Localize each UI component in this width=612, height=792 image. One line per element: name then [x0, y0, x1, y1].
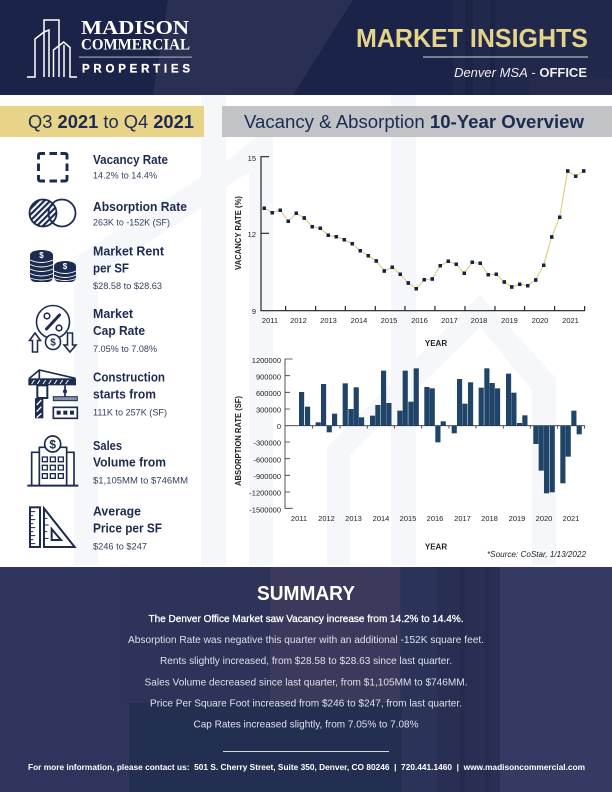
- absorption year labels: 2021: [563, 514, 579, 523]
- summary text: Absorption Rate was negative this quarter with an additional -152K square feet.: [128, 634, 484, 646]
- vacancy x-axis title: YEAR: [425, 339, 447, 348]
- vacancy year labels: 2019: [501, 316, 518, 325]
- absorption y labels: 600000: [256, 389, 281, 398]
- summary text: Rents slightly increased, from $28.58 to $28.63 since last quarter.: [160, 655, 452, 667]
- icon: cap rate: $: [50, 338, 56, 348]
- summary text: Cap Rates increased slightly, from 7.05% to 7.08%: [194, 718, 418, 730]
- metric: cap rate: Cap Rate: [93, 323, 145, 338]
- metric: market rent: [93, 244, 165, 292]
- summary text: [128, 613, 484, 730]
- absorption axes: [285, 359, 585, 508]
- absorption y labels: 0: [277, 422, 281, 431]
- icon: cap rate: [30, 306, 76, 352]
- metric: vacancy rate: [93, 152, 168, 182]
- metric: cap rate: Market: [93, 306, 134, 321]
- absorption x-axis title: YEAR: [425, 542, 447, 552]
- metric: market rent: per SF: [93, 260, 129, 276]
- logo wordmark: [79, 17, 192, 76]
- metric: absorption rate: [93, 199, 187, 228]
- summary panel: [0, 567, 612, 792]
- vacancy year labels: 2013: [320, 316, 337, 325]
- absorption year labels: 2017: [454, 514, 471, 523]
- source note: *Source: CoStar, 1/13/2022: [487, 550, 587, 559]
- icon: coin stacks: [30, 250, 76, 282]
- absorption year labels: 2015: [400, 514, 416, 523]
- metric: cap rate: [93, 306, 158, 355]
- summary text: Price Per Square Foot increased from $246 to $247, from last quarter.: [150, 698, 462, 710]
- metric: vacancy rate: Vacancy Rate: [93, 152, 168, 167]
- summary background: [0, 567, 612, 792]
- chart banner: Vacancy & Absorption 10-Year Overview: [244, 111, 585, 132]
- vacancy axes: [261, 157, 585, 311]
- vacancy y labels: 12: [248, 230, 256, 239]
- absorption y labels: -1200000: [249, 488, 281, 498]
- summary text: Sales Volume decreased since last quarter, from $1,105MM to $746MM.: [144, 676, 468, 688]
- icon: ruler and set square: [30, 507, 75, 547]
- metric: sales volume: $1,105MM to $746MM: [93, 476, 188, 486]
- logo wordmark: PROPERTIES: [82, 64, 190, 76]
- absorption year labels: 2011: [291, 514, 307, 523]
- metric: market rent: $28.58 to $28.63: [93, 281, 162, 292]
- vacancy year labels: 2011: [262, 316, 278, 325]
- icon: vacancy rate: [38, 154, 67, 181]
- absorption y labels: 300000: [256, 406, 281, 414]
- absorption year labels: 2012: [318, 514, 335, 523]
- vacancy y labels: 15: [248, 154, 256, 163]
- absorption y labels: [249, 356, 281, 514]
- metric: absorption rate: Absorption Rate: [93, 199, 187, 214]
- icon: office building with dollar: $: [49, 437, 56, 451]
- absorption year labels: 2018: [481, 514, 498, 523]
- summary heading: SUMMARY: [257, 583, 356, 605]
- vacancy year labels: 2021: [562, 316, 579, 325]
- absorption year labels: 2014: [373, 514, 389, 523]
- metric: sales volume: Sales: [93, 438, 122, 453]
- metric: construction starts: 111K to 257K (SF): [93, 408, 167, 418]
- logo wordmark: COMMERCIAL: [81, 36, 190, 54]
- vacancy year labels: 2015: [381, 316, 397, 325]
- title: Market Insights: MARKET INSIGHTS: [356, 23, 588, 53]
- metric: construction starts: starts from: [93, 386, 156, 402]
- logo: Madison Commercial Properties: [27, 17, 192, 77]
- vacancy data line: [264, 171, 584, 289]
- subtitle: Denver MSA - Office: Denver MSA - OFFICE: [454, 65, 587, 80]
- metric: average price: Price per SF: [93, 520, 162, 536]
- vacancy year labels: [262, 316, 579, 325]
- vacancy year labels: 2014: [351, 316, 367, 325]
- icon: absorption rate: [30, 200, 76, 226]
- metric: sales volume: [93, 438, 188, 486]
- period banner: [0, 106, 204, 137]
- header band: [0, 0, 612, 95]
- metric: construction starts: [93, 370, 167, 418]
- metric: average price: Average: [93, 504, 141, 518]
- line chart: vacancy rate: [234, 154, 585, 348]
- logo wordmark: MADISON: [81, 17, 190, 39]
- metric: vacancy rate: 14.2% to 14.4%: [93, 170, 158, 182]
- absorption year labels: 2020: [536, 514, 552, 523]
- metric: cap rate: 7.05% to 7.08%: [93, 344, 158, 355]
- absorption y labels: -900000: [253, 472, 281, 481]
- absorption year labels: [291, 514, 579, 523]
- vacancy year labels: 2012: [290, 316, 307, 325]
- vacancy year labels: 2020: [532, 316, 548, 325]
- absorption y labels: -1500000: [249, 506, 281, 514]
- header rule: [423, 56, 588, 58]
- icon: construction crane: [28, 370, 77, 418]
- vacancy year labels: 2017: [441, 316, 458, 325]
- metric: market rent: Market Rent: [93, 244, 165, 258]
- metric: construction starts: Construction: [93, 370, 165, 384]
- vacancy y labels: [248, 154, 256, 316]
- icon: coin stacks: $: [63, 262, 68, 271]
- metric: sales volume: Volume from: [93, 454, 166, 470]
- vacancy y labels: 9: [252, 307, 256, 316]
- vacancy y-axis title: VACANCY RATE (%): [234, 196, 243, 270]
- background watermark: building outlines: [74, 95, 556, 565]
- absorption y-axis title: ABSORPTION RATE (SF): [234, 396, 243, 486]
- vacancy year labels: 2016: [411, 316, 428, 325]
- period banner: Q3 2021 to Q4 2021: [28, 111, 194, 132]
- bar chart: absorption rate: [234, 356, 585, 552]
- logo icon: skyline: [27, 20, 77, 77]
- icon: office building with dollar: [27, 436, 78, 486]
- absorption y labels: 900000: [256, 372, 281, 382]
- summary text: The Denver Office Market saw Vacancy increase from 14.2% to 14.4%.: [148, 613, 464, 625]
- metric: absorption rate: 263K to -152K (SF): [93, 218, 170, 228]
- chart banner: [222, 106, 612, 137]
- icon: coin stacks: $: [39, 251, 44, 260]
- absorption y labels: -600000: [253, 456, 281, 464]
- metric: average price: $246 to $247: [93, 542, 147, 552]
- absorption y labels: 1200000: [252, 356, 281, 365]
- vacancy year labels: 2018: [471, 316, 487, 325]
- absorption year labels: 2019: [509, 514, 525, 523]
- absorption bars: [299, 368, 582, 493]
- footer contact line: For more information, please contact us: 501 S. Cherry Street, Suite 350, Denver, CO 80246 | 720.441.1460 | www.madisoncommercial.com: [28, 763, 585, 772]
- absorption year labels: 2013: [345, 514, 362, 523]
- absorption y labels: -300000: [253, 438, 281, 448]
- absorption year labels: 2016: [427, 514, 443, 523]
- metric: average price: [93, 504, 162, 552]
